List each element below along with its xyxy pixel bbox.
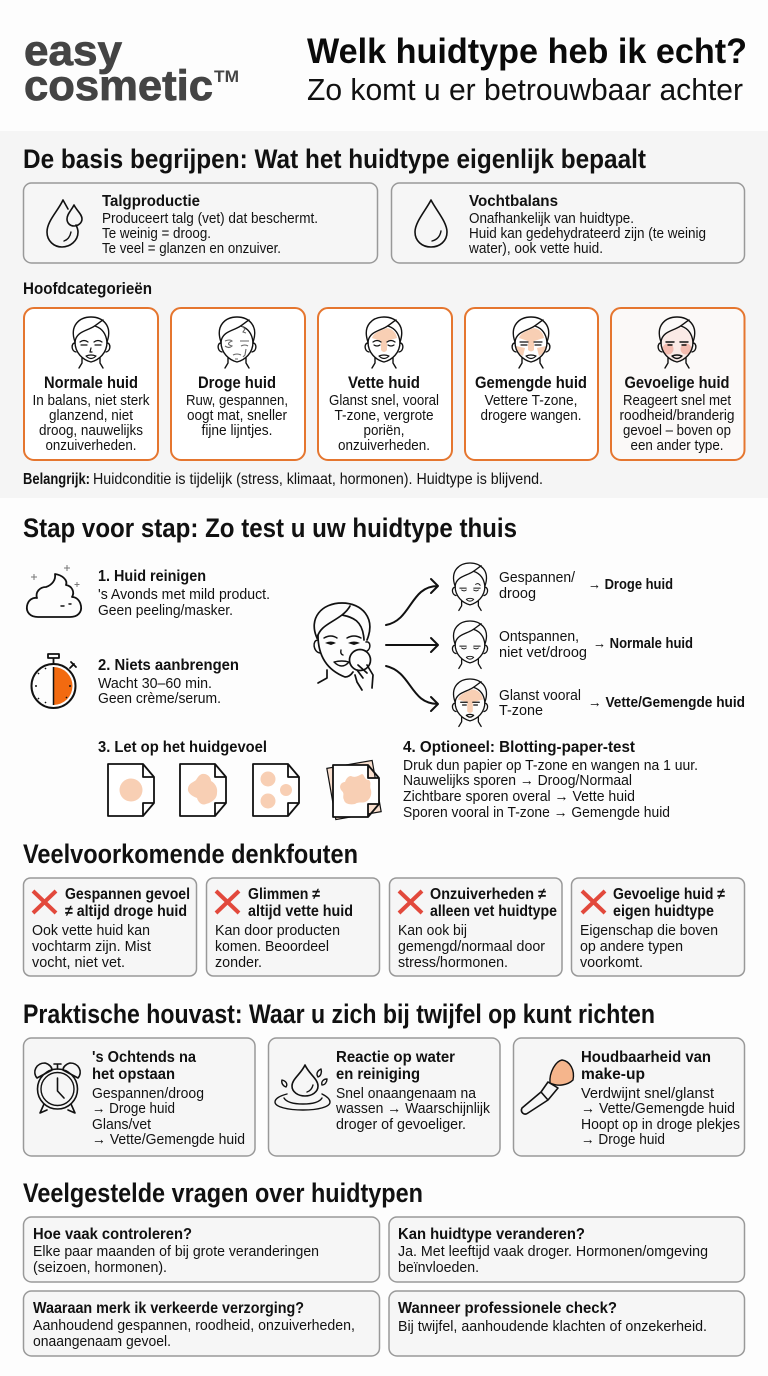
text: step 2: 2. Niets aanbrengen (98, 657, 239, 674)
panel: ochtends (24, 1038, 255, 1156)
text: normale huid: glanzend, niet (49, 407, 134, 424)
icon: dry face (218, 317, 256, 368)
text: droge huid: oogt mat, sneller (187, 407, 287, 424)
text: step 4: 4. Optioneel: Blotting-paper-test (403, 739, 636, 756)
panel: faq 1: (seizoen, hormonen). (33, 1259, 167, 1276)
text: ochtends: → Vette/Gemengde huid (92, 1131, 245, 1148)
text: normale huid: droog, nauwelijks (39, 422, 143, 439)
panel: gevoelige huid (611, 308, 744, 460)
basics section background (0, 131, 768, 498)
text: talgproductie (102, 193, 318, 257)
text: talgproductie: Te weinig = droog. (102, 225, 211, 242)
logo: TM (214, 67, 239, 86)
subtitle: Zo komt u er betrouwbaar achter (307, 72, 743, 107)
text: gevoelige huid: een ander type. (630, 437, 724, 454)
text: droge huid: Droge huid (198, 373, 276, 392)
panel: misconception 1 (24, 878, 196, 976)
text: normale huid (32, 373, 150, 454)
text: misconception 4: op andere typen (580, 938, 683, 955)
icon: water drop (415, 200, 447, 247)
arrow: to oily (386, 666, 438, 711)
text: step 1 (98, 568, 270, 619)
text: talgproductie: Te veel = glanzen en onzuiver. (102, 240, 281, 257)
text: water: wassen → Waarschijnlijk (335, 1100, 490, 1117)
text: water (335, 1049, 490, 1133)
note: belangrijk: Huidconditie is tijdelijk (stress, klimaat, hormonen). Huidtype is blijvend. (93, 471, 543, 488)
text: misconception 4 (580, 886, 725, 971)
arrow: to dry (386, 579, 438, 625)
text: step 4: Druk dun papier op T-zone en wangen na 1 uur. (403, 757, 698, 774)
text: misconception 4: Gevoelige huid ≠ (613, 886, 725, 903)
panel: faq 3 (24, 1291, 380, 1356)
text: misconception 1: vochtarm zijn. Mist (32, 938, 152, 955)
text: misconception 3: stress/hormonen. (398, 954, 508, 971)
text: droge huid: fijne lijntjes. (202, 422, 272, 439)
heading: hoofdcategorieen: Hoofdcategorieën (23, 279, 152, 298)
text: ochtends: → Droge huid (92, 1100, 175, 1117)
text: misconception 1: Gespannen gevoel (65, 886, 190, 903)
icon: cross (399, 891, 422, 913)
text: make-up: make-up (581, 1066, 645, 1083)
text: normale huid: Normale huid (44, 373, 138, 392)
text: vochtbalans: Vochtbalans (469, 193, 558, 210)
logo (24, 27, 239, 110)
text: misconception 2: altijd vette huid (248, 903, 353, 920)
text: misconception 2: zonder. (215, 954, 262, 971)
panel: make-up (514, 1038, 744, 1156)
text: misconception 4: voorkomt. (580, 954, 643, 971)
panel: faq 2 (389, 1217, 744, 1282)
icon: paper with large blot (180, 764, 226, 816)
text: normal result: → Normale huid (593, 635, 693, 652)
icon: stopwatch (32, 654, 76, 708)
icon: paper with round spot (108, 764, 154, 816)
text: gemengde huid: Vettere T-zone, (484, 392, 578, 409)
panel: faq 3: onaangenaam gevoel. (33, 1333, 171, 1350)
icon: cross (216, 891, 239, 913)
text: misconception 1: Ook vette huid kan (32, 922, 150, 939)
icon: sensitive face (658, 317, 696, 368)
text: vochtbalans: Onafhankelijk van huidtype. (469, 210, 634, 227)
text: normal result: Ontspannen, (499, 628, 579, 645)
text: gevoelige huid: Reageert snel met (623, 392, 732, 409)
text: oily result: Glanst vooral (499, 687, 581, 704)
text: water: Snel onaangenaam na (336, 1085, 477, 1102)
panel: gemengde huid (465, 308, 598, 460)
text: misconception 2 (215, 886, 353, 971)
panel: faq 2: Kan huidtype veranderen? (398, 1226, 585, 1243)
text: vette huid: poriën, (364, 422, 404, 439)
text: make-up: Hoopt op in droge plekjes (581, 1116, 740, 1133)
text: misconception 2: Glimmen ≠ (248, 886, 320, 903)
text: gevoelige huid: roodheid/branderig (620, 407, 734, 424)
text: misconception 1: vocht, niet vet. (32, 954, 125, 971)
icon: oily result face (452, 679, 488, 726)
icon: two drops (47, 200, 82, 247)
panel: faq 1: Hoe vaak controleren? (33, 1226, 192, 1243)
logo: easy (24, 27, 122, 75)
text: step 4: Sporen vooral in T-zone → Gemengde huid (403, 804, 670, 821)
text: vette huid (329, 373, 439, 454)
text: normale huid: onzuiverheden. (46, 437, 136, 454)
panel: vochtbalans (392, 183, 744, 263)
text: misconception 3: Kan ook bij (398, 922, 467, 939)
icon: normal face (72, 317, 110, 368)
heading: praktische houvast: Praktische houvast: Waar u zich bij twijfel op kunt richten (23, 999, 655, 1029)
text: vette huid: Vette huid (348, 373, 420, 392)
text: step 2: Geen crème/serum. (98, 690, 221, 707)
icon: alarm clock (35, 1063, 80, 1113)
text: dry result: → Droge huid (588, 576, 673, 593)
text: ochtends: het opstaan (92, 1066, 175, 1083)
panel: faq 2: beïnvloeden. (398, 1259, 479, 1276)
icon: oily face (365, 317, 403, 368)
panel: faq 1: Elke paar maanden of bij grote veranderingen (33, 1243, 319, 1260)
text: ochtends: 's Ochtends na (92, 1049, 196, 1066)
text: misconception 3 (398, 886, 557, 971)
icon: foam (27, 565, 81, 617)
panel: faq 4: Wanneer professionele check? (398, 1300, 617, 1317)
text: ochtends: Gespannen/droog (92, 1085, 204, 1102)
icon: dry result face (452, 563, 488, 610)
text: misconception 4: Eigenschap die boven (580, 922, 718, 939)
panel: water (268, 1038, 500, 1156)
panel: faq 4 (389, 1291, 744, 1356)
icon: paper with three spots (253, 764, 299, 816)
text: dry result (499, 569, 673, 602)
text: water: Reactie op water (336, 1049, 455, 1066)
text: droge huid: Ruw, gespannen, (186, 392, 288, 409)
panel: faq 3: Waaraan merk ik verkeerde verzorging? (33, 1300, 304, 1317)
text: gevoelige huid: gevoel – boven op (623, 422, 731, 439)
text: normale huid: In balans, niet sterk (32, 392, 150, 409)
panel: vette huid (318, 308, 452, 460)
text: vochtbalans (468, 193, 706, 257)
text: dry result: Gespannen/ (499, 569, 576, 586)
text: step 4 (403, 739, 698, 821)
icon: cross (582, 891, 605, 913)
text: ochtends (92, 1049, 245, 1148)
text: normal result: niet vet/droog (499, 644, 587, 661)
text: step 1: 's Avonds met mild product. (98, 586, 270, 603)
text: step 1: 1. Huid reinigen (98, 568, 206, 585)
text: droge huid (186, 373, 288, 439)
heading: basis: De basis begrijpen: Wat het huidtype eigenlijk bepaalt (23, 144, 646, 174)
text: misconception 3: alleen vet huidtype (430, 903, 557, 920)
text: misconception 3: Onzuiverheden ≠ (430, 886, 546, 903)
text: step 2 (98, 657, 239, 707)
text: gevoelige huid: Gevoelige huid (624, 373, 730, 392)
text: make-up: → Droge huid (581, 1131, 665, 1148)
text: vochtbalans: Huid kan gedehydrateerd zijn (te weinig (469, 225, 706, 242)
text: gevoelige huid (620, 373, 734, 454)
text: vette huid: T-zone, vergrote (334, 407, 434, 424)
text: misconception 4: eigen huidtype (613, 903, 714, 920)
logo: cosmetic (24, 62, 213, 110)
note: belangrijk: Belangrijk: (23, 471, 90, 488)
icon: stacked papers with blot (327, 760, 381, 820)
text: gemengde huid (475, 373, 587, 424)
panel: normale huid (24, 308, 158, 460)
panel: talgproductie (24, 183, 378, 263)
heading: stap voor stap: Stap voor stap: Zo test u uw huidtype thuis (23, 513, 517, 543)
panel: droge huid (171, 308, 305, 460)
title: Welk huidtype heb ik echt? (307, 32, 747, 71)
text: misconception 3: gemengd/normaal door (398, 938, 545, 955)
text: step 1: Geen peeling/masker. (98, 602, 233, 619)
arrow: to normal (386, 638, 438, 652)
text: talgproductie: Produceert talg (vet) dat beschermt. (102, 210, 318, 227)
icon: combination face (512, 317, 550, 368)
text: make-up: Verdwijnt snel/glanst (581, 1085, 715, 1102)
text: dry result: droog (499, 585, 536, 602)
text: oily result (499, 687, 745, 719)
panel: misconception 2 (206, 878, 380, 976)
text: misconception 1: ≠ altijd droge huid (65, 903, 187, 920)
text: oily result: → Vette/Gemengde huid (588, 694, 745, 711)
text: step 4: Nauwelijks sporen → Droog/Normaal (403, 772, 632, 789)
panel: misconception 4 (572, 878, 744, 976)
text: step 3 heading: 3. Let op het huidgevoel (98, 739, 267, 756)
text: make-up: Houdbaarheid van (581, 1049, 711, 1066)
text: gemengde huid: drogere wangen. (480, 407, 582, 424)
text: oily result: T-zone (499, 702, 543, 719)
panel: faq 2: Ja. Met leeftijd vaak droger. Hormonen/omgeving (398, 1243, 708, 1260)
icon: makeup brush (521, 1060, 573, 1114)
panel: faq 1 (24, 1217, 380, 1282)
heading: veelgestelde vragen: Veelgestelde vragen over huidtypen (23, 1178, 423, 1208)
icon: cross (33, 891, 56, 913)
text: make-up (581, 1049, 740, 1148)
icon: normal result face (452, 621, 488, 668)
panel: faq 4: Bij twijfel, aanhoudende klachten of onzekerheid. (398, 1318, 707, 1335)
text: ochtends: Glans/vet (92, 1116, 152, 1133)
text: step 2: Wacht 30–60 min. (98, 675, 212, 692)
text: vette huid: onzuiverheden. (338, 437, 430, 454)
text: talgproductie: Talgproductie (102, 193, 200, 210)
text: misconception 2: Kan door producten (215, 922, 340, 939)
text: water: en reiniging (336, 1066, 420, 1083)
text: normal result (499, 628, 693, 661)
text: step 4: Zichtbare sporen overal → Vette huid (403, 788, 635, 805)
text: make-up: → Vette/Gemengde huid (581, 1100, 735, 1117)
text: vette huid: Glanst snel, vooral (329, 392, 439, 409)
panel: misconception 3 (390, 878, 562, 976)
text: gemengde huid: Gemengde huid (475, 373, 587, 392)
panel: faq 3: Aanhoudend gespannen, roodheid, onzuiverheden, (33, 1317, 355, 1334)
text: misconception 1 (32, 886, 190, 971)
icon: water splash (275, 1065, 330, 1110)
heading: denkfouten: Veelvoorkomende denkfouten (23, 839, 358, 869)
text: vochtbalans: water), ook vette huid. (468, 240, 603, 257)
text: water: droger of gevoeliger. (336, 1116, 466, 1133)
icon: face with cotton pad (314, 603, 373, 690)
text: misconception 2: komen. Beoordeel (215, 938, 329, 955)
